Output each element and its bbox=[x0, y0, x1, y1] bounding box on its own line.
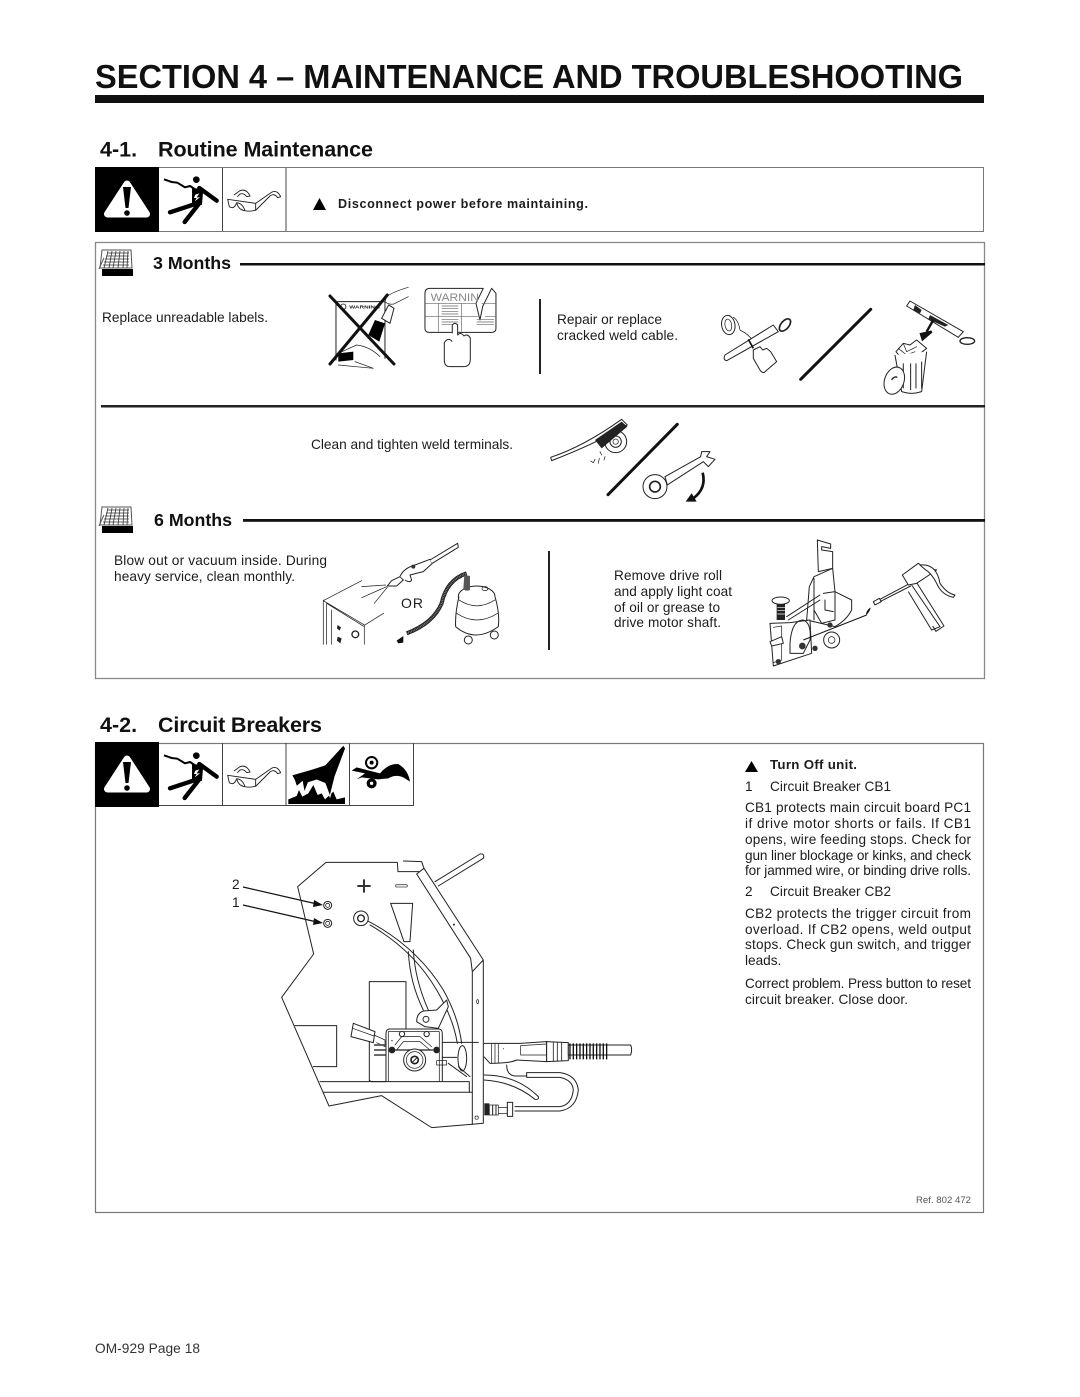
text: turn off unit and instructions: CB2 protects the trigger circuit from bbox=[745, 906, 971, 921]
text: turn off unit and instructions: if drive motor shorts or fails. If CB1 bbox=[745, 816, 971, 831]
icon: warning triangle bbox=[95, 742, 159, 807]
icon: drive assembly and grease gun bbox=[770, 540, 955, 666]
panel: disconnect power warning bbox=[95, 167, 984, 232]
text: turn off unit and instructions: stops. Check gun switch, and trigger bbox=[745, 937, 971, 952]
icon: new warning label with finger: WARNIN bbox=[431, 292, 479, 304]
warning text: Disconnect power before maintaining. bbox=[338, 197, 588, 211]
text: turn off unit and instructions: opens, wire feeding stops. Check for bbox=[745, 832, 971, 847]
icon: safety glasses bbox=[228, 190, 281, 211]
heading: routine maintenance: Routine Maintenance bbox=[158, 138, 373, 162]
icon: calendar 6 months bbox=[99, 507, 133, 533]
text: turn off unit and instructions: Circuit Breaker CB1 bbox=[770, 779, 891, 794]
icon: electric shock bbox=[164, 752, 217, 798]
callout numbers 2 and 1: 2 bbox=[232, 877, 240, 892]
text: turn off unit and instructions: Correct problem. Press button to reset bbox=[745, 976, 971, 991]
icon: do not paint over label bbox=[330, 287, 408, 368]
text: blow out: heavy service, clean monthly. bbox=[114, 569, 295, 584]
callout numbers 2 and 1: 1 bbox=[232, 895, 240, 910]
icon: new warning label with finger bbox=[425, 288, 496, 367]
divider: 6 months columns bbox=[548, 551, 550, 650]
icon: wire brush on terminal bbox=[551, 419, 627, 463]
text: remove drive roll: drive motor shaft. bbox=[614, 615, 721, 630]
text: remove drive roll: Remove drive roll bbox=[614, 568, 722, 583]
heading: circuit breakers: 4-2. bbox=[100, 713, 137, 737]
slash: clean or tighten bbox=[608, 424, 677, 495]
icon: calendar 3 months bbox=[99, 250, 133, 276]
text: turn off unit and instructions: leads. bbox=[745, 953, 781, 968]
text: turn off unit and instructions: gun liner blockage or kinks, and check bbox=[745, 848, 971, 863]
rule: middle section divider bbox=[101, 405, 985, 408]
panel: routine maintenance schedule bbox=[96, 242, 985, 678]
machine diagram bbox=[232, 854, 632, 1128]
divider: 3 months columns bbox=[539, 299, 541, 374]
text: clean terminals: Clean and tighten weld terminals. bbox=[311, 437, 513, 452]
rule: 3 months bbox=[240, 263, 985, 266]
text: remove drive roll: of oil or grease to bbox=[614, 600, 720, 615]
icon: safety glasses bbox=[228, 766, 281, 787]
text: blow out bbox=[114, 553, 327, 584]
heading: 6 months: 6 Months bbox=[154, 510, 232, 530]
text: replace labels: Replace unreadable labels. bbox=[102, 310, 268, 325]
icon: repair cable with tape bbox=[720, 314, 793, 373]
text: turn off unit and instructions: circuit breaker. Close door. bbox=[745, 992, 908, 1007]
text: turn off unit and instructions: 1 bbox=[745, 779, 753, 794]
text: turn off unit and instructions: CB1 protects main circuit board PC1 bbox=[745, 800, 971, 815]
page footer: OM-929 Page 18 bbox=[95, 1341, 200, 1356]
panel: circuit breakers bbox=[95, 742, 984, 1212]
text: repair cable: cracked weld cable. bbox=[557, 328, 678, 343]
heading: 3 months: 3 Months bbox=[153, 253, 231, 273]
icon: warning triangle bbox=[95, 167, 159, 232]
welding gun and cable bbox=[484, 1042, 632, 1116]
rule: 6 months bbox=[243, 519, 985, 522]
text: remove drive roll bbox=[614, 568, 732, 630]
icon: do not paint over label: WARNING bbox=[349, 305, 380, 311]
icon: hot surface burn bbox=[288, 745, 346, 804]
title rule bbox=[95, 95, 984, 103]
icon: moving parts rollers bbox=[352, 757, 410, 788]
icon: shop vacuum bbox=[397, 573, 499, 644]
text: repair cable bbox=[557, 312, 678, 343]
icon: wrench tightening terminal bbox=[643, 452, 715, 502]
title: SECTION 4 – MAINTENANCE AND TROUBLESHOOTING bbox=[95, 59, 963, 96]
slash: repair or replace bbox=[801, 309, 871, 379]
text: turn off unit and instructions: overload. If CB2 opens, weld output bbox=[745, 922, 971, 937]
text: turn off unit and instructions: Circuit Breaker CB2 bbox=[770, 884, 891, 899]
text: turn off unit and instructions: for jammed wire, or binding drive rolls. bbox=[745, 863, 971, 878]
text: or: OR bbox=[401, 595, 423, 611]
callout numbers 2 and 1 bbox=[232, 877, 323, 925]
icon: blow gun and welder bbox=[323, 543, 458, 644]
text: turn off unit and instructions bbox=[745, 757, 971, 1007]
text: remove drive roll: and apply light coat bbox=[614, 584, 732, 599]
text: turn off unit and instructions: Turn Off unit. bbox=[770, 757, 857, 772]
text: repair cable: Repair or replace bbox=[557, 312, 662, 327]
heading: routine maintenance: 4-1. bbox=[100, 138, 137, 162]
heading: circuit breakers: Circuit Breakers bbox=[158, 713, 322, 737]
icon: electric shock bbox=[164, 176, 217, 222]
text: blow out: Blow out or vacuum inside. During bbox=[114, 553, 327, 568]
icon: discard cable in trash can bbox=[880, 301, 975, 397]
text: turn off unit and instructions: 2 bbox=[745, 884, 753, 899]
reference number: Ref. 802 472 bbox=[916, 1195, 971, 1206]
chassis and wire drive bbox=[282, 854, 484, 1128]
